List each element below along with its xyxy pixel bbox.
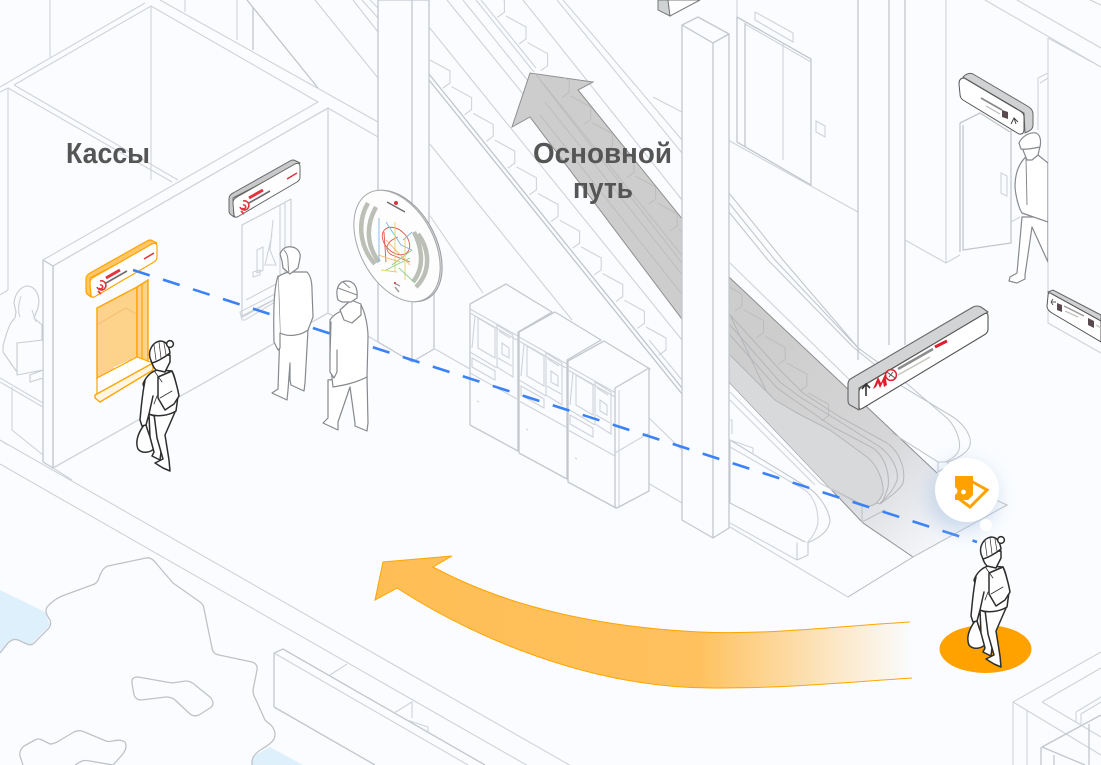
ticket machines bbox=[470, 284, 650, 508]
ticket icon bbox=[955, 476, 987, 507]
main path heading: Основной bbox=[533, 138, 672, 170]
orange floor marker bbox=[940, 625, 1032, 673]
left escalator lobe bbox=[730, 392, 863, 597]
long floor lines bbox=[0, 440, 580, 765]
no entry icon bbox=[886, 370, 896, 380]
pillar 1 bbox=[378, 0, 434, 362]
highlighted ticket window bbox=[95, 280, 153, 402]
ticket office heading: Кассы bbox=[66, 138, 150, 170]
sign top right bbox=[959, 73, 1033, 134]
sign right edge bbox=[1047, 290, 1101, 342]
bench bbox=[274, 649, 485, 765]
machine 2 bbox=[519, 312, 601, 479]
main path heading: путь bbox=[573, 173, 633, 205]
water patches bbox=[0, 590, 303, 765]
main path grey arrow bbox=[512, 73, 1007, 557]
person in queue 2 bbox=[323, 281, 368, 431]
map lines bbox=[377, 218, 415, 282]
big metro sign bbox=[848, 306, 988, 410]
person in queue 1 bbox=[272, 247, 313, 400]
floor plan blobs bbox=[0, 558, 275, 765]
main path heading bbox=[533, 138, 672, 205]
escalator gray lobe pedestal bbox=[862, 505, 885, 522]
window 2 grey bbox=[240, 199, 291, 320]
thought bubble bbox=[929, 458, 999, 531]
right escalator lobe bbox=[729, 193, 970, 472]
sign above window 2 bbox=[229, 160, 300, 217]
orange arrow to ticket office bbox=[375, 556, 912, 688]
floor plane lines bbox=[848, 495, 1007, 597]
cashier woman behind counter bbox=[0, 286, 43, 455]
person at ticket window bbox=[137, 341, 179, 471]
metro logo bbox=[873, 374, 887, 389]
elevator and wall section bbox=[728, 0, 1101, 360]
grey crescents bbox=[361, 203, 427, 287]
top-left room ceiling lines bbox=[0, 0, 378, 295]
stairs upper bbox=[484, 0, 548, 71]
dashed route line bbox=[133, 270, 977, 542]
pillar 2 bbox=[682, 17, 729, 538]
door bbox=[960, 113, 1020, 252]
escalator rail lines bbox=[428, 0, 858, 503]
steps and rails inside grey path bbox=[530, 61, 904, 506]
person near door bbox=[1009, 133, 1048, 283]
walking person with thought bbox=[968, 537, 1010, 667]
grey lobes of escalator bbox=[730, 315, 904, 506]
metro map round board bbox=[336, 176, 460, 316]
highlighted sign above window bbox=[86, 240, 157, 297]
ticket office wall bbox=[43, 108, 470, 480]
stairs left bbox=[430, 60, 666, 355]
bottom right building bbox=[1013, 652, 1101, 765]
machine 1 bbox=[470, 284, 552, 451]
arrow icon bbox=[862, 384, 870, 396]
machine 3 bbox=[568, 341, 650, 508]
top sign fragment bbox=[658, 0, 700, 16]
